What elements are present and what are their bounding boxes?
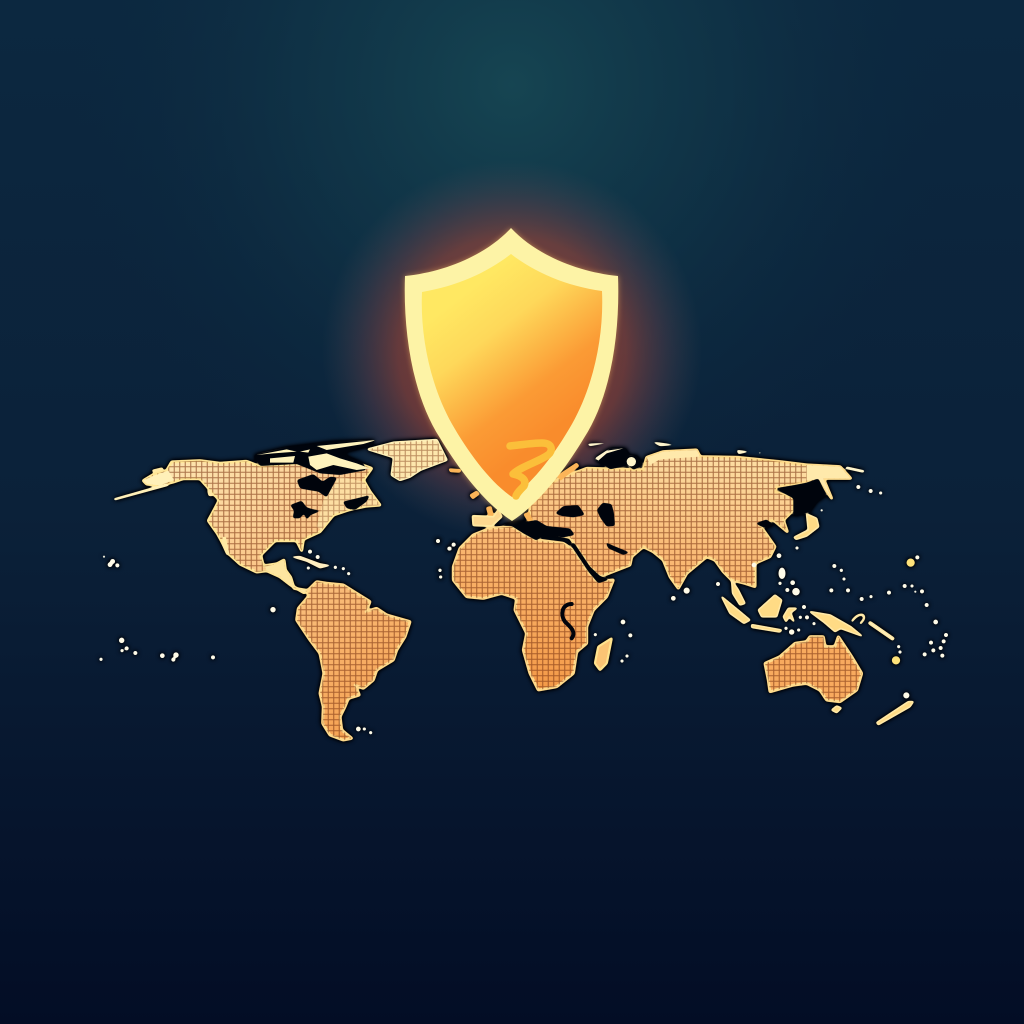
- world map: [99, 440, 948, 740]
- alaska cream coast and aleutian line: [113, 471, 174, 500]
- pale siberian coast: [647, 450, 851, 498]
- shield: [405, 228, 618, 521]
- cuba: [290, 556, 332, 568]
- north america: [143, 461, 380, 593]
- new guinea tail: [852, 615, 864, 624]
- africa: [453, 527, 613, 690]
- large yellow islands: [892, 559, 915, 664]
- shield glow: [322, 160, 702, 540]
- americas: [99, 440, 456, 740]
- south america: [297, 582, 410, 740]
- southeast asia islands: [722, 514, 913, 725]
- madagascar: [595, 638, 612, 670]
- pacific and caribbean island dots: [99, 539, 456, 734]
- shield soft glow edge: [405, 228, 618, 521]
- pale east canada: [317, 477, 380, 530]
- gulf of st lawrence: [343, 495, 370, 510]
- shield scribble mark: [510, 443, 551, 496]
- scandinavia sliver and arctic islands: [587, 442, 865, 473]
- iberia and western europe: [473, 510, 502, 526]
- ocean island dots: [436, 485, 948, 698]
- european spikes beside shield: [448, 463, 579, 523]
- australia: [765, 637, 862, 702]
- central america: [265, 560, 307, 593]
- eurasia africa oceania: [436, 442, 948, 725]
- hudson bay: [297, 474, 337, 497]
- eurasia: [530, 450, 851, 588]
- greenland: [368, 440, 447, 480]
- great lakes: [290, 501, 322, 520]
- shield rim: [405, 228, 618, 521]
- mediterranean and seas: [495, 448, 827, 583]
- african lake: [562, 604, 573, 638]
- arctic archipelago: [253, 440, 378, 475]
- shield face: [422, 254, 602, 497]
- west coast islands and baja: [152, 467, 229, 555]
